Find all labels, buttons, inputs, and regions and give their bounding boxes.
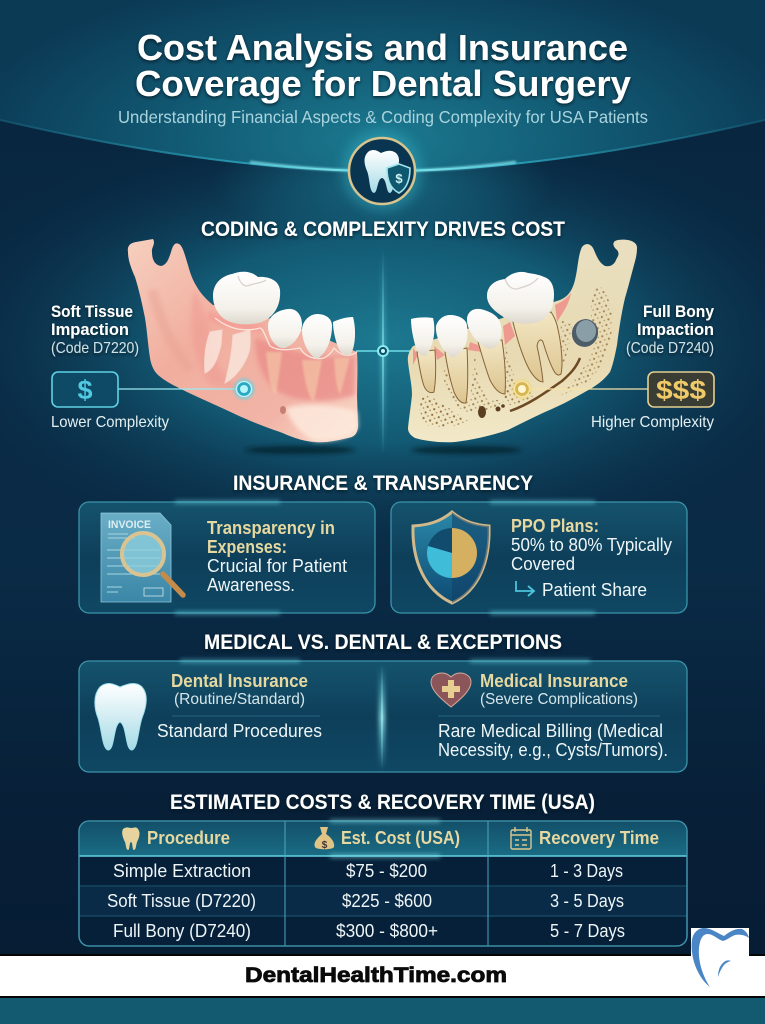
low cost badge and connector: $ [77, 375, 93, 405]
text: transparency in expenses [207, 518, 347, 595]
title: Cost Analysis and Insurance [137, 27, 628, 68]
footer website: DentalHealthTime.com [245, 964, 507, 987]
nerve canal and holes [510, 358, 580, 411]
title: Coverage for Dental Surgery [135, 63, 631, 104]
icon: money bag: $ [322, 840, 328, 851]
premolar [467, 309, 502, 349]
text: ppo plans [511, 516, 672, 600]
panel: ppo plans [391, 502, 687, 613]
heading: coding and complexity: CODING & COMPLEXITY DRIVES COST [201, 218, 565, 241]
logo: blue tooth [691, 928, 749, 987]
low cost badge and connector [52, 372, 255, 407]
icon: tooth [122, 827, 140, 850]
premolar 2 [302, 314, 332, 359]
text: ppo plans: PPO Plans: [511, 516, 599, 536]
row: simple extraction [113, 861, 623, 881]
icon: tooth and dollar shield [342, 131, 422, 211]
row: soft tissue [107, 891, 624, 911]
row: simple extraction: 1 - 3 Days [550, 861, 623, 881]
text: dental insurance: Standard Procedures [157, 721, 322, 741]
canine [436, 315, 468, 358]
icon: money bag [314, 827, 334, 851]
impacted roots [205, 330, 250, 383]
label: lower complexity: Lower Complexity [51, 414, 169, 431]
subtitle: Understanding Financial Aspects & Coding Complexity for USA Patients [118, 107, 648, 127]
row: soft tissue: $225 - $600 [342, 891, 432, 911]
molar [213, 272, 280, 324]
text: medical insurance [438, 671, 668, 760]
icon: heart with cross [431, 673, 471, 707]
tooth roots [417, 312, 562, 403]
table header: Procedure [147, 828, 230, 848]
text: ppo plans: Covered [511, 554, 575, 574]
label: full bony impaction: (Code D7240) [626, 340, 714, 357]
footer band [0, 954, 765, 1024]
title [135, 27, 631, 104]
label: full bony impaction: Impaction [637, 320, 714, 339]
text: medical insurance: Necessity, e.g., Cysts/Tumors). [438, 740, 668, 760]
row: simple extraction: Simple Extraction [113, 861, 251, 881]
icon: calendar [511, 827, 531, 849]
text: medical insurance: Medical Insurance [480, 671, 628, 691]
jaw: full bony impaction [408, 240, 637, 454]
label: full bony impaction: Full Bony [643, 302, 714, 321]
label: soft tissue impaction: Impaction [51, 320, 129, 339]
row: full bony: 5 - 7 Days [550, 921, 625, 941]
label: soft tissue impaction: Soft Tissue [51, 302, 133, 321]
embedded roots [266, 352, 350, 402]
table: costs and recovery [79, 821, 687, 946]
text: transparency in expenses: Expenses: [207, 537, 287, 557]
gum line [215, 318, 357, 359]
premolar 1 [268, 309, 302, 348]
text: transparency in expenses: Crucial for Patient [207, 556, 347, 576]
label: soft tissue impaction: (Code D7220) [51, 340, 139, 357]
high cost badge and connector: $$$ [656, 375, 706, 405]
row: soft tissue: 3 - 5 Days [550, 891, 624, 911]
table header [122, 827, 659, 851]
icon: tooth and dollar shield: $ [395, 171, 403, 186]
label: soft tissue impaction [51, 302, 139, 357]
high cost badge and connector [512, 372, 714, 407]
icon: white tooth [95, 684, 146, 750]
text: dental insurance [157, 671, 322, 741]
icon: invoice with magnifier: INVOICE [108, 519, 151, 531]
header band [0, 0, 765, 171]
heading: medical vs dental: MEDICAL VS. DENTAL & EXCEPTIONS [204, 631, 562, 654]
molar [487, 272, 554, 324]
heading: insurance and transparency: INSURANCE & TRANSPARENCY [233, 472, 533, 495]
row: full bony [113, 921, 625, 941]
table header: Est. Cost (USA) [341, 828, 460, 848]
incisor [411, 317, 434, 356]
panel: transparency in expenses [79, 502, 375, 613]
text: ppo plans: 50% to 80% Typically [511, 535, 672, 555]
row: full bony: $300 - $800+ [336, 921, 438, 941]
text: dental insurance: (Routine/Standard) [174, 691, 305, 708]
arrow: patient share [516, 581, 534, 596]
center divider with node [356, 250, 410, 455]
text: dental insurance: Dental Insurance [171, 671, 308, 691]
row: simple extraction: $75 - $200 [346, 861, 427, 881]
row: soft tissue: Soft Tissue (D7220) [107, 891, 256, 911]
text: ppo plans: Patient Share [542, 580, 647, 600]
row: full bony: Full Bony (D7240) [113, 921, 251, 941]
cyst [568, 315, 602, 351]
text: medical insurance: Rare Medical Billing (Medical [438, 721, 663, 741]
gum remnants [413, 293, 571, 365]
text: transparency in expenses: Awareness. [207, 575, 295, 595]
table header: Recovery Time [539, 828, 659, 848]
jaw: soft tissue impaction [128, 239, 358, 454]
icon: invoice with magnifier [101, 513, 183, 602]
incisor [333, 317, 355, 355]
text: transparency in expenses: Transparency in [207, 518, 335, 538]
panel: medical vs dental [79, 661, 687, 772]
label: higher complexity: Higher Complexity [591, 414, 714, 431]
text: medical insurance: (Severe Complications) [480, 691, 638, 708]
label: full bony impaction [626, 302, 714, 357]
heading: estimated costs: ESTIMATED COSTS & RECOVERY TIME (USA) [170, 791, 595, 814]
icon: shield with pie chart [413, 512, 489, 603]
